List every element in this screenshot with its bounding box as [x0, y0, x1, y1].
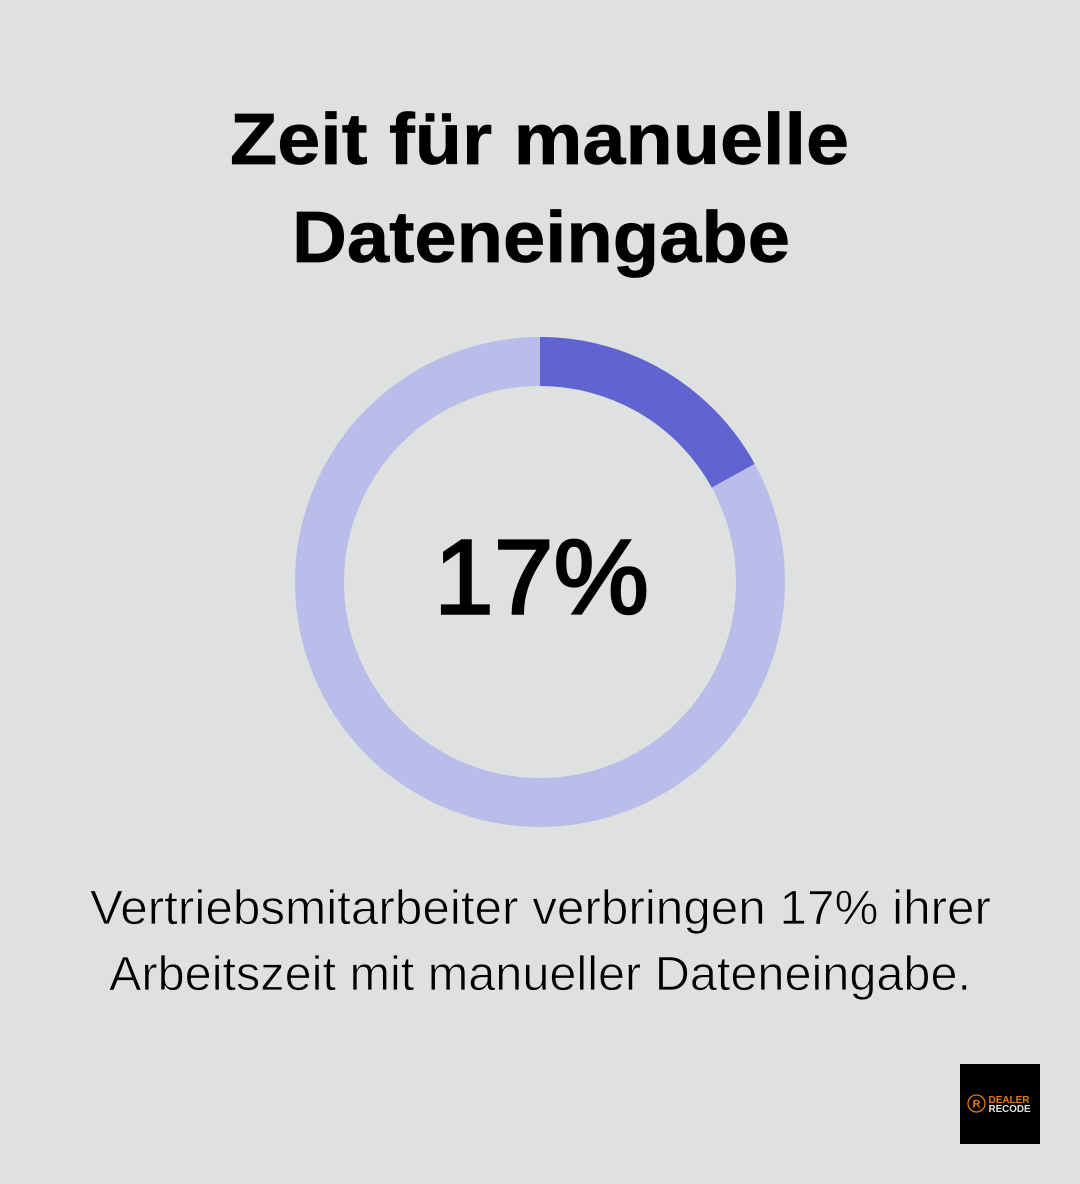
center value: 17%: [434, 518, 649, 636]
description text: Arbeitszeit mit manueller Dateneingabe.: [109, 948, 971, 1001]
logo wordmark: DEALER: [988, 1095, 1030, 1106]
donut chart: 17%: [320, 362, 760, 802]
description text: Vertriebsmitarbeiter verbringen 17% ihrer: [90, 882, 991, 935]
title: [230, 100, 849, 278]
title: Zeit für manuelle: [230, 100, 849, 180]
logo: Dealer Recode: [960, 1064, 1040, 1144]
title: Dateneingabe: [292, 198, 790, 278]
logo wordmark: [988, 1095, 1031, 1115]
logo wordmark: RECODE: [988, 1104, 1031, 1115]
icon: R in ring: R: [973, 1098, 981, 1110]
description text: [90, 882, 991, 1001]
